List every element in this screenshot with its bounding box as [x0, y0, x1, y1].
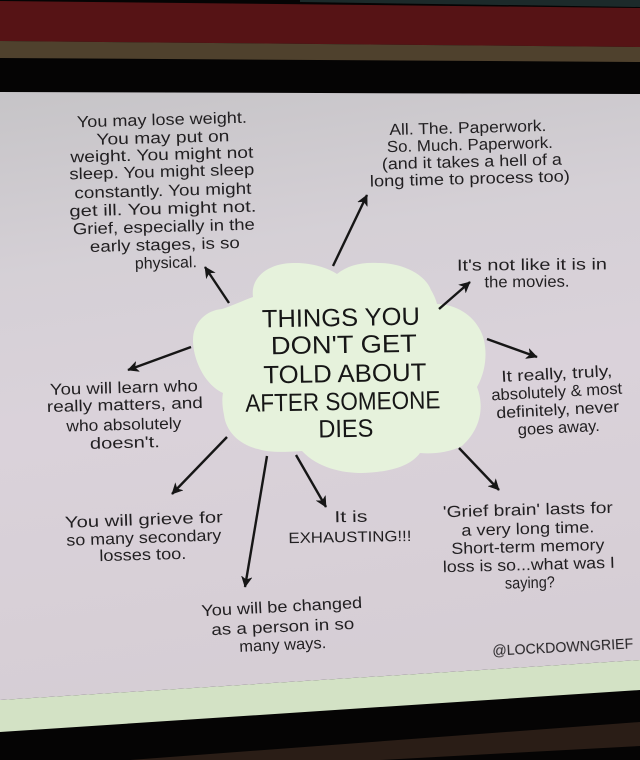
arrows: [128, 195, 537, 587]
text: secondary losses: You will grieve for: [65, 509, 224, 532]
text: changed: as a person in so: [211, 616, 355, 639]
text: secondary losses: so many secondary: [66, 527, 222, 550]
text: paperwork: So. Much. Paperwork.: [387, 135, 553, 156]
text: physical effects: physical.: [135, 254, 197, 273]
text: physical effects: weight. You might not: [69, 145, 254, 166]
text: physical effects: Grief, especially in the: [73, 217, 255, 238]
title: DIES: [318, 415, 374, 443]
text: changed: You will be changed: [201, 595, 363, 620]
text: paperwork: All. The. Paperwork.: [389, 118, 547, 139]
text: movies: [457, 256, 607, 291]
text: physical effects: sleep. You might sleep: [69, 162, 255, 183]
arrow: to grief brain: [459, 448, 499, 490]
text: physical effects: You may put on: [96, 128, 230, 149]
text: never goes away: absolutely & most: [491, 381, 623, 404]
title: DON'T GET: [271, 330, 417, 360]
screen panel: [0, 92, 640, 700]
text: grief brain: loss is so...what was I: [443, 555, 615, 576]
text: grief brain: Short-term memory: [451, 537, 605, 558]
title: TOLD ABOUT: [263, 359, 427, 389]
text: movies: It's not like it is in: [457, 256, 607, 275]
text: paperwork: long time to process too): [370, 168, 570, 191]
cloud shape: [193, 263, 486, 473]
arrow: to secondary losses: [172, 437, 227, 494]
text: who matters: doesn't.: [90, 434, 160, 453]
text: physical effects: get ill. You might not.: [69, 199, 257, 220]
arrow: to physical: [205, 267, 229, 303]
arrow: to changed: [245, 456, 267, 587]
text: paperwork: [370, 118, 570, 191]
text: changed: many ways.: [239, 635, 327, 656]
text: grief brain: a very long time.: [461, 519, 595, 540]
arrow: to paperwork: [333, 195, 367, 266]
text: never goes away: goes away.: [517, 418, 600, 439]
title: [245, 303, 441, 443]
text: who matters: [47, 378, 203, 453]
text: grief brain: saying?: [505, 574, 555, 593]
text: physical effects: early stages, is so: [90, 235, 240, 256]
arrow: to exhausting: [296, 455, 326, 507]
arrow: to who matters: [128, 347, 191, 370]
monitor bezel strip: [0, 660, 640, 732]
text: paperwork: (and it takes a hell of a: [382, 152, 562, 173]
title: AFTER SOMEONE: [245, 386, 441, 418]
title: THINGS YOU: [262, 303, 420, 333]
text: never goes away: definitely, never: [496, 399, 620, 422]
text: exhausting: EXHAUSTING!!!: [288, 528, 412, 547]
text: changed: [201, 595, 363, 656]
text: movies: the movies.: [484, 274, 570, 291]
arrow: to never goes away: [487, 339, 537, 357]
text: grief brain: [443, 500, 615, 593]
text: physical effects: constantly. You might: [74, 181, 252, 202]
text: who matters: who absolutely: [65, 415, 182, 436]
text: never goes away: [491, 363, 623, 439]
text: exhausting: [288, 509, 412, 547]
text: who matters: You will learn who: [50, 378, 198, 399]
text: physical effects: You may lose weight.: [77, 110, 247, 131]
text: handle: @LOCKDOWNGRIEF: [492, 636, 634, 660]
text: never goes away: It really, truly,: [501, 363, 613, 386]
text: secondary losses: losses too.: [99, 546, 187, 565]
text: physical effects: [69, 110, 257, 273]
arrow: to movies: [439, 282, 470, 309]
text: grief brain: 'Grief brain' lasts for: [443, 500, 614, 521]
text: secondary losses: [65, 509, 224, 565]
text: exhausting: It is: [334, 509, 368, 526]
text: who matters: really matters, and: [47, 395, 203, 416]
